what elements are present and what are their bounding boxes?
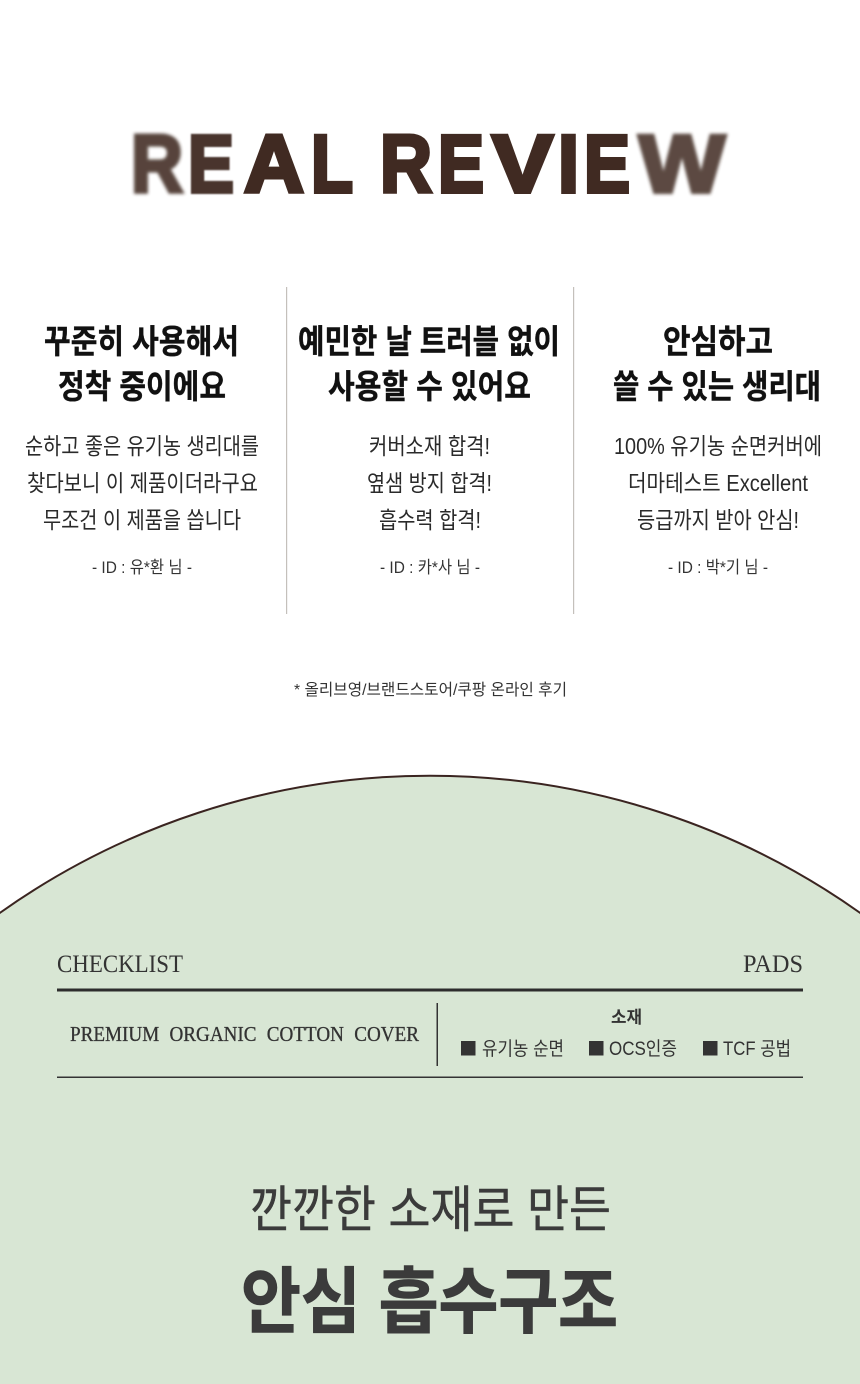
- heading: review 1: 정착 중이에요: [58, 368, 226, 405]
- text: review 1 body: [25, 433, 259, 533]
- title: REAL REVIEW: I: [558, 119, 579, 210]
- panel: review 1: [25, 323, 259, 577]
- text: review 1 id: - ID : 유*환 님 -: [92, 558, 192, 577]
- heading: review 1: 꾸준히 사용해서: [44, 323, 239, 360]
- item: TCF process: TCF 공법: [723, 1038, 791, 1060]
- panel: review 3: [613, 323, 822, 577]
- panel: checklist: [57, 951, 803, 1078]
- panel: green arc background: [0, 776, 860, 1384]
- item: TCF process: [703, 1038, 791, 1060]
- text: review 3 body: 등급까지 받아 안심!: [637, 507, 799, 533]
- title: REAL REVIEW: R: [131, 119, 183, 210]
- title: REAL REVIEW: E: [584, 119, 630, 210]
- text: review 3 id: - ID : 박*기 님 -: [668, 558, 768, 577]
- divider: right: [573, 287, 574, 614]
- title: REAL REVIEW: A: [244, 119, 304, 210]
- heading: review 3: [613, 323, 821, 405]
- text: review 1 body: 순하고 좋은 유기농 생리대를: [25, 433, 259, 459]
- text: premium organic cotton cover: PREMIUM ORGANIC COTTON COVER: [70, 1022, 419, 1046]
- title: REAL REVIEW: L: [311, 119, 353, 210]
- text: review 2 id: - ID : 카*사 님 -: [380, 558, 480, 577]
- text: review 1 body: 무조건 이 제품을 씁니다: [43, 507, 241, 533]
- text: review 2 body: 커버소재 합격!: [369, 433, 490, 459]
- title: REAL REVIEW: R: [380, 119, 432, 210]
- footnote: * 올리브영/브랜드스토어/쿠팡 온라인 후기: [294, 681, 567, 699]
- heading: material: 소재: [611, 1008, 642, 1027]
- title: REAL REVIEW: [131, 119, 726, 210]
- text: review 3 body: [614, 433, 822, 533]
- heading: review 2: 예민한 날 트러블 없이: [298, 323, 560, 360]
- item: organic cotton: [461, 1038, 564, 1060]
- label: CHECKLIST: CHECKLIST: [57, 951, 183, 978]
- text: review 3 body: 100% 유기농 순면커버에: [614, 433, 822, 459]
- heading: review 3: 쓸 수 있는 생리대: [613, 368, 821, 405]
- title: REAL REVIEW: V: [492, 119, 553, 210]
- panel: review 2: [298, 323, 560, 577]
- label: PADS: PADS: [743, 951, 803, 978]
- heading: subtitle: 깐깐한 소재로 만든: [250, 1182, 611, 1238]
- item: OCS certified: [589, 1038, 677, 1060]
- text: review 2 body: [367, 433, 492, 533]
- title: REAL REVIEW: W: [639, 119, 726, 210]
- item: OCS certified: OCS인증: [609, 1038, 677, 1060]
- text: review 1 body: 찾다보니 이 제품이더라구요: [27, 470, 258, 496]
- title: REAL REVIEW: E: [438, 119, 484, 210]
- text: review 3 body: 더마테스트 Excellent: [628, 470, 809, 496]
- text: review 2 body: 옆샘 방지 합격!: [367, 470, 492, 496]
- heading: review 1: [44, 323, 239, 405]
- heading: main: 안심 흡수구조: [241, 1263, 618, 1343]
- title: REAL REVIEW: E: [188, 119, 234, 210]
- heading: review 2: [298, 323, 560, 405]
- divider: left: [286, 287, 287, 614]
- text: review 2 body: 흡수력 합격!: [379, 507, 481, 533]
- heading: review 2: 사용할 수 있어요: [328, 368, 531, 405]
- item: organic cotton: 유기농 순면: [482, 1038, 564, 1060]
- heading: review 3: 안심하고: [663, 323, 773, 360]
